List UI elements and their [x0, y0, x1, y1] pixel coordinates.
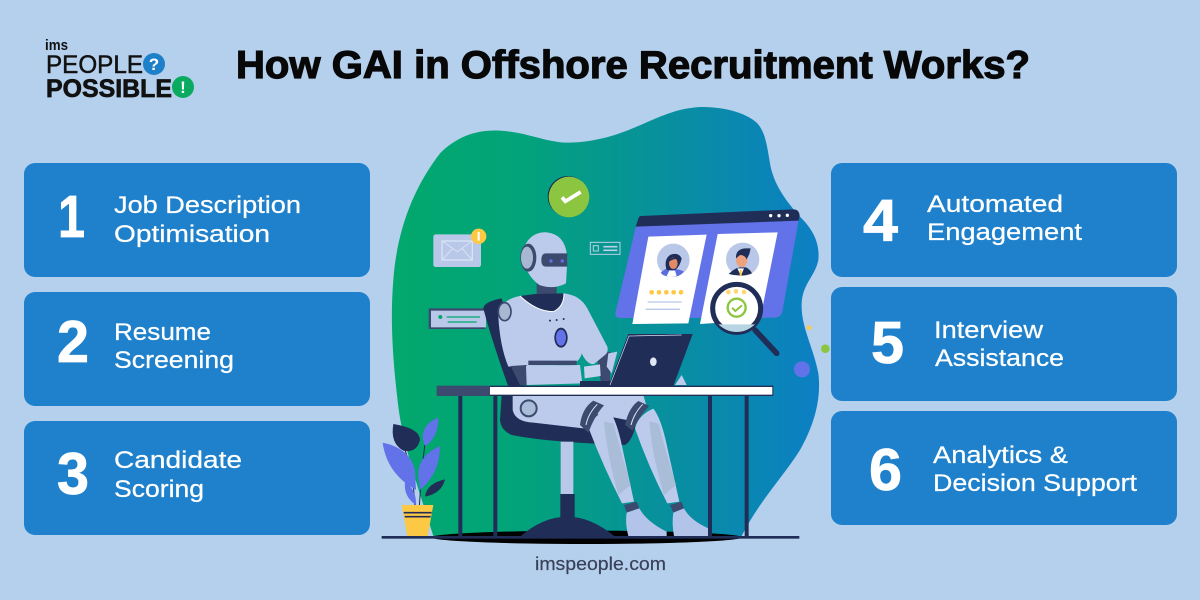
panel: step 3: 3	[57, 441, 89, 507]
panel: step 5: Interview	[934, 317, 1044, 344]
panel: step 2: 2	[57, 309, 89, 375]
logo: PEOPLE	[46, 51, 143, 79]
panel: step 1: 1	[58, 184, 85, 250]
icon: check badge	[548, 176, 589, 217]
footer url: imspeople.com	[535, 554, 666, 574]
logo: ?	[149, 55, 159, 74]
illustration: robot recruiter	[382, 107, 830, 544]
panel: step 6: 6	[869, 437, 902, 503]
robot torso and arms	[498, 283, 687, 385]
panel: step 5: 5	[871, 310, 904, 376]
panel: step 1	[24, 163, 370, 277]
logo: POSSIBLE	[46, 75, 172, 103]
panel: step 4: Automated	[927, 191, 1063, 218]
panel: step 2: Resume	[114, 319, 211, 346]
icon: small id card	[590, 242, 620, 254]
panel: step 6: Analytics &	[933, 442, 1068, 469]
logo	[45, 37, 194, 103]
panel: step 2	[24, 292, 370, 406]
panel: step 6	[831, 411, 1177, 525]
desk	[437, 386, 773, 536]
browser window with candidate cards	[615, 209, 800, 324]
logo: !	[180, 78, 186, 97]
chair	[483, 298, 637, 537]
panel: step 4: 4	[863, 188, 898, 254]
candidate card: woman	[632, 235, 707, 324]
panel: step 3: Candidate	[114, 447, 242, 474]
background blob	[392, 107, 819, 536]
ground line	[382, 536, 799, 539]
panel: step 5	[831, 287, 1177, 401]
panel: step 4: Engagement	[927, 219, 1082, 246]
robot legs	[513, 395, 708, 536]
plant	[383, 418, 445, 536]
panel: step 4	[831, 163, 1177, 277]
decorative dots	[794, 325, 830, 377]
panel: step 1: Optimisation	[114, 221, 270, 248]
panel: step 2: Screening	[114, 347, 234, 374]
title: How GAI in Offshore Recruitment Works?	[236, 44, 1030, 87]
panel: step 6: Decision Support	[933, 470, 1137, 497]
panel: step 5: Assistance	[935, 345, 1064, 372]
icon: message strip	[429, 308, 486, 329]
panel: step 3	[24, 421, 370, 535]
robot head	[520, 232, 567, 287]
panel: step 3: Scoring	[114, 476, 204, 503]
icon: magnifier	[713, 284, 777, 353]
robot	[498, 232, 708, 536]
panel: step 1: Job Description	[114, 192, 301, 219]
candidate card: man	[700, 232, 778, 324]
icon: envelope	[433, 229, 486, 267]
logo: ims	[45, 37, 68, 54]
laptop	[580, 334, 693, 386]
ground shadow	[432, 531, 742, 544]
